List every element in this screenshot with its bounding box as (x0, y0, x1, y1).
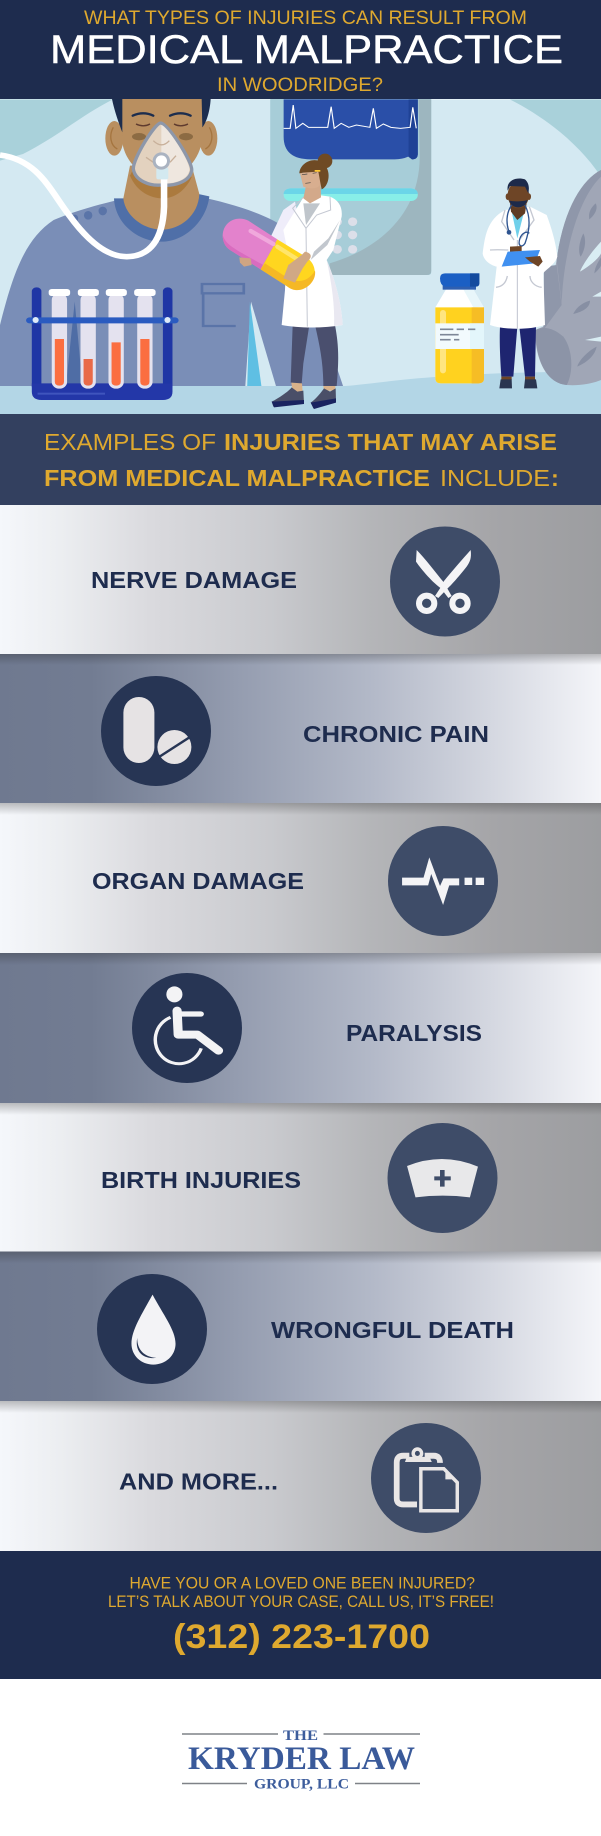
logo: The Kryder Law Group: THE (283, 1728, 318, 1744)
patient head and mask (105, 99, 217, 242)
monitor (284, 99, 418, 159)
row: birth injuries (0, 1103, 601, 1252)
section heading: FROM MEDICAL MALPRACTICE (44, 465, 430, 491)
row: organ damage: ORGAN DAMAGE (92, 868, 304, 894)
logo: The Kryder Law Group: KRYDER LAW (188, 1741, 415, 1777)
medicine bottle (435, 273, 484, 383)
icon: pills (123, 697, 191, 764)
icon: clipboard (397, 1449, 457, 1511)
title: MEDICAL MALPRACTICE (50, 28, 563, 72)
icon: scissors (416, 550, 471, 611)
plant (535, 170, 601, 385)
pill capsule (223, 219, 315, 290)
row: nerve damage: NERVE DAMAGE (91, 567, 297, 593)
row: paralysis: PARALYSIS (346, 1020, 482, 1046)
call to action banner (0, 1551, 601, 1679)
wall panel (270, 97, 431, 275)
doctor (483, 178, 557, 388)
icon: drop (131, 1295, 176, 1365)
call to action banner: LET’S TALK ABOUT YOUR CASE, CALL US, IT’S FREE! (108, 1593, 494, 1611)
illustration: hospital scene (0, 97, 601, 414)
cyan bar (284, 188, 418, 201)
header line: question: WHAT TYPES OF INJURIES CAN RESULT FROM (84, 7, 527, 29)
row: paralysis (0, 953, 601, 1103)
ecg trace (284, 105, 416, 128)
row: chronic pain (0, 654, 601, 803)
icon: heartbeat (402, 857, 484, 905)
row: wrongful death (0, 1252, 601, 1401)
oxygen tube (0, 155, 164, 257)
row: organ damage (0, 803, 601, 953)
row: chronic pain: CHRONIC PAIN (303, 721, 489, 747)
logo: The Kryder Law Group: GROUP, LLC (254, 1776, 349, 1792)
panel buttons (333, 217, 357, 254)
icon: wheelchair (155, 986, 218, 1064)
section heading: INJURIES THAT MAY ARISE (224, 429, 557, 455)
section heading: EXAMPLES OF (44, 429, 216, 455)
row: and more (0, 1401, 601, 1551)
phone number: (312) 223-1700 (173, 1618, 430, 1656)
row: and more: AND MORE... (119, 1468, 278, 1494)
test tube rack (26, 287, 179, 400)
nurse (270, 154, 343, 409)
icon: nurse cap (407, 1159, 478, 1197)
logo: The Kryder Law Group (182, 1728, 420, 1792)
section heading: INCLUDE (440, 465, 550, 491)
call to action banner: HAVE YOU OR A LOVED ONE BEEN INJURED? (130, 1574, 475, 1592)
row: nerve damage (0, 505, 601, 654)
header line: location: IN WOODRIDGE? (217, 74, 383, 96)
header banner (0, 0, 601, 99)
patient body (0, 197, 343, 386)
row: wrongful death: WRONGFUL DEATH (271, 1317, 514, 1343)
mask valve (153, 152, 170, 179)
section heading: : (551, 465, 559, 491)
section heading (0, 414, 601, 505)
row: birth injuries: BIRTH INJURIES (101, 1167, 301, 1193)
